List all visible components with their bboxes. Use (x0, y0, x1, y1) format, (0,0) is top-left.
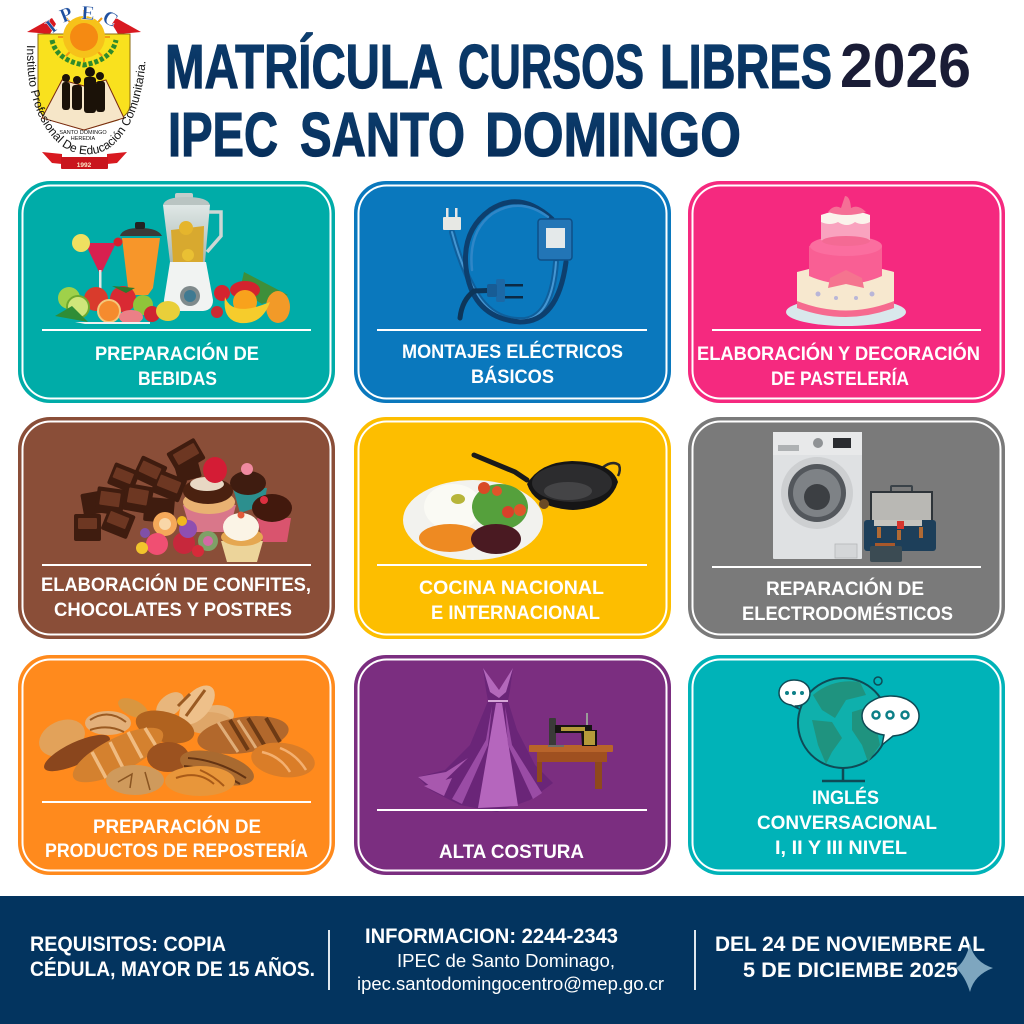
gown (418, 668, 553, 812)
logo book (42, 80, 124, 130)
label: PRODUCTOS DE REPOSTERÍA (45, 839, 308, 862)
logo top ribbons (27, 18, 141, 34)
icon: blender and fruit (55, 193, 290, 324)
label (95, 341, 259, 390)
label: INGLÉS (812, 786, 879, 809)
label: ALTA COSTURA (439, 841, 584, 863)
logo place: HEREDIA (71, 136, 96, 142)
logo figures (62, 67, 105, 113)
divider (42, 801, 311, 803)
logo laurel (52, 40, 116, 65)
title line 2: IPEC (168, 101, 278, 170)
información (357, 925, 664, 994)
label: PREPARACIÓN DE (93, 814, 261, 838)
icon: washing machine and toolbox (773, 432, 936, 562)
icon: plate and frying pan (403, 455, 620, 560)
icon: globe with speech bubbles (779, 677, 919, 781)
title line 2: DOMINGO (485, 101, 741, 170)
icon: chocolates and cupcakes (74, 438, 292, 562)
title line 1 (165, 33, 832, 102)
logo IPEC letters: I (42, 16, 61, 38)
title line 1: CURSOS (458, 33, 644, 102)
label (757, 786, 937, 859)
label: COCINA NACIONAL (419, 577, 604, 599)
logo shield (38, 34, 130, 130)
logo bottom ribbon (42, 152, 127, 169)
title line 1: MATRÍCULA (165, 33, 443, 102)
divider (712, 329, 981, 331)
globe stand (822, 768, 865, 781)
label: CONVERSACIONAL (757, 812, 937, 834)
sewing table (529, 745, 613, 789)
panel: productos de repostería (18, 655, 335, 875)
title line 2 (168, 101, 741, 170)
large speech bubble (862, 696, 919, 745)
requisitos (30, 933, 315, 981)
label: ELABORACIÓN DE CONFITES, (41, 572, 311, 596)
logo IPEC letters: E (81, 2, 95, 25)
panel: alta costura (354, 655, 671, 875)
label: REPARACIÓN DE (766, 576, 924, 600)
logo place: SANTO DOMINGO (59, 130, 107, 136)
logo IPEC letters: P (57, 3, 76, 28)
logo IPEC letters: C (99, 6, 122, 32)
panel: preparación de bebidas (18, 181, 335, 403)
fechas (715, 933, 985, 982)
panel: inglés conversacional (688, 655, 1005, 875)
icon: sparkle star (956, 944, 993, 992)
información: IPEC de Santo Dominago, (397, 950, 615, 971)
logo sun (58, 10, 110, 62)
fechas: DEL 24 DE NOVIEMBRE AL (715, 933, 985, 956)
panel: cocina nacional e internacional (354, 417, 671, 639)
divider (377, 329, 647, 331)
requisitos: CÉDULA, MAYOR DE 15 AÑOS. (30, 958, 315, 981)
logo place (59, 130, 107, 142)
logo: IPEC shield (26, 2, 146, 169)
label: MONTAJES ELÉCTRICOS (402, 340, 623, 363)
label: BEBIDAS (138, 368, 217, 390)
label (697, 341, 980, 390)
label (402, 340, 623, 388)
icon: pastries and croissants (33, 679, 317, 796)
panel: confites, chocolates y postres (18, 417, 335, 639)
year: 2026 (840, 32, 971, 101)
small speech bubble (779, 680, 810, 709)
label: CHOCOLATES Y POSTRES (54, 599, 292, 621)
divider (712, 566, 981, 568)
logo bottom ribbon: 1992 (77, 162, 92, 169)
información: ipec.santodomingocentro@mep.go.cr (357, 973, 664, 994)
label: BÁSICOS (471, 365, 554, 388)
label: ELABORACIÓN Y DECORACIÓN (697, 341, 980, 365)
fechas: 5 DE DICIEMBE 2025 (743, 959, 958, 982)
title (165, 33, 832, 170)
sewing machine (548, 713, 597, 747)
title line 1: LIBRES (660, 33, 832, 102)
label (419, 577, 604, 624)
icon: electric cable (443, 202, 572, 322)
label: I, II Y III NIVEL (775, 837, 907, 859)
title line 2: SANTO (300, 101, 465, 170)
label (45, 814, 308, 862)
divider (377, 809, 647, 811)
panel: reparación de electrodomésticos (688, 417, 1005, 639)
label: ELECTRODOMÉSTICOS (742, 602, 953, 625)
divider (377, 564, 647, 566)
label (41, 572, 311, 621)
label: E INTERNACIONAL (431, 602, 600, 624)
icon: gown and sewing machine (418, 668, 613, 812)
icon: layered cake (786, 196, 906, 326)
requisitos: REQUISITOS: COPIA (30, 933, 226, 956)
logo circular name: Instituto Profesional De Educación Comunitaria. (26, 46, 146, 154)
divider (42, 329, 311, 331)
logo IPEC letters (42, 2, 122, 38)
label: DE PASTELERÍA (771, 367, 909, 390)
panel: elaboración y decoración de pastelería (688, 181, 1005, 403)
información: INFORMACION: 2244-2343 (365, 925, 618, 948)
label (742, 576, 953, 625)
panel: montajes eléctricos básicos (354, 181, 671, 403)
label: PREPARACIÓN DE (95, 341, 259, 365)
footer band (0, 896, 1024, 1024)
divider (42, 564, 311, 566)
